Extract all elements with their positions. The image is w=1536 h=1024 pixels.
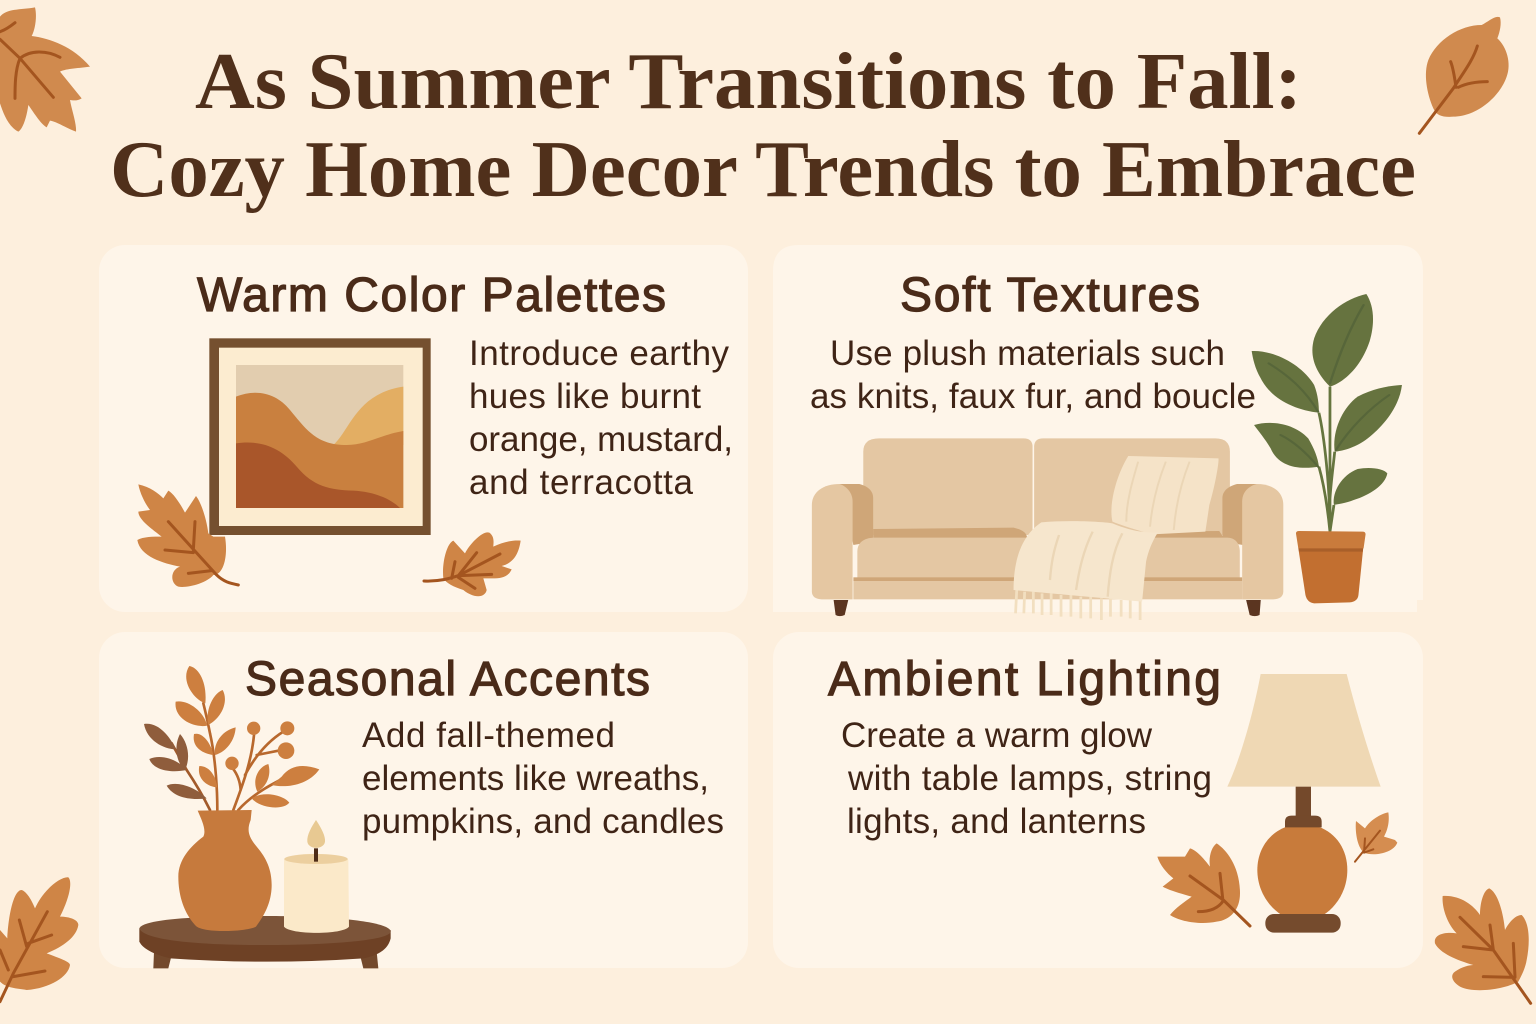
icon: potted plant xyxy=(1252,294,1402,603)
icon: left maple leaf xyxy=(137,484,238,587)
panel: ambient lighting xyxy=(773,632,1423,968)
text: warm color palettes description: hues like burnt xyxy=(469,377,701,416)
icon: fringed throw blanket xyxy=(1014,521,1158,620)
icon: vase with autumn branches xyxy=(144,666,319,931)
icon: small leaf beside lamp xyxy=(1355,812,1397,862)
text: seasonal accents description: pumpkins, and candles xyxy=(362,802,724,841)
icon: top-right corner leaf xyxy=(1419,17,1509,133)
text: seasonal accents description xyxy=(362,716,724,841)
panel: seasonal accents xyxy=(99,632,748,968)
text: seasonal accents description: elements like wreaths, xyxy=(362,759,709,798)
icon: wooden side table xyxy=(139,916,391,968)
icon: striped pillow xyxy=(1111,456,1219,534)
icon: table lamp xyxy=(1227,674,1381,933)
heading: ambient lighting: Ambient Lighting xyxy=(828,653,1221,706)
text: soft textures description xyxy=(810,334,1256,416)
title xyxy=(110,36,1416,214)
icon: right oak leaf xyxy=(424,532,521,596)
text: warm color palettes description: Introduce earthy xyxy=(469,334,730,373)
text: ambient lighting description: Create a warm glow xyxy=(841,716,1153,755)
text: ambient lighting description: with table lamps, string xyxy=(847,759,1212,798)
icon: bottom-left corner leaf xyxy=(0,877,78,1002)
heading: seasonal accents: Seasonal Accents xyxy=(245,653,650,706)
text: warm color palettes description: and terracotta xyxy=(469,463,694,502)
icon: bottom-right corner leaf xyxy=(1435,888,1531,1003)
heading: soft textures: Soft Textures xyxy=(900,269,1200,322)
text: ambient lighting description: lights, and lanterns xyxy=(847,802,1146,841)
icon: top-left corner leaf xyxy=(0,7,90,132)
text: warm color palettes description: orange, mustard, xyxy=(469,420,733,459)
icon: sofa xyxy=(812,438,1283,616)
panel: soft textures xyxy=(773,245,1423,620)
icon: large leaf beside lamp xyxy=(1157,843,1250,926)
title: Cozy Home Decor Trends to Embrace xyxy=(110,124,1416,214)
text: ambient lighting description xyxy=(841,716,1212,841)
title: As Summer Transitions to Fall: xyxy=(195,36,1302,126)
text: soft textures description: Use plush materials such xyxy=(830,334,1225,373)
text: warm color palettes description xyxy=(469,334,733,502)
text: soft textures description: as knits, faux fur, and boucle xyxy=(810,377,1256,416)
panel: warm color palettes xyxy=(99,245,748,612)
heading: warm color palettes: Warm Color Palettes xyxy=(197,269,666,322)
icon: framed landscape art xyxy=(209,338,431,535)
icon: lit candle xyxy=(284,820,349,933)
text: seasonal accents description: Add fall-themed xyxy=(362,716,615,755)
